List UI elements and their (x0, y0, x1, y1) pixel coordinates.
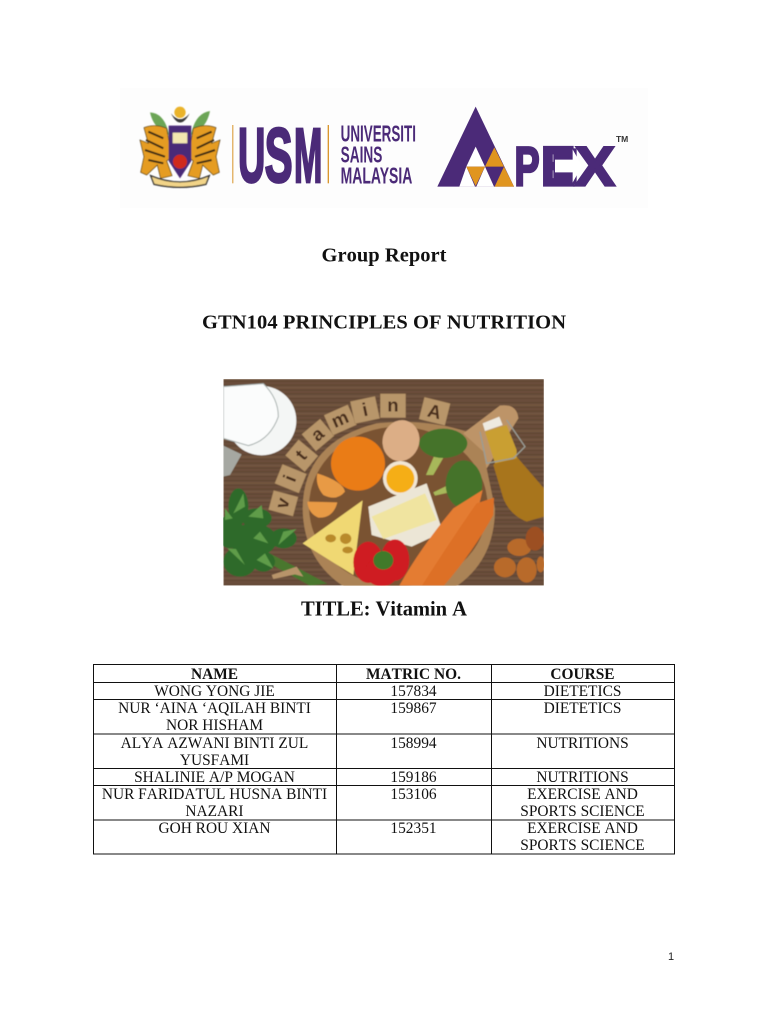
oil bottle (480, 417, 544, 522)
shield (169, 126, 191, 178)
logo: USM wordmark: SAINS (341, 141, 382, 167)
letter tiles: m (328, 406, 352, 432)
row: Nur Aina Aqilah (118, 700, 621, 734)
butter on paper (368, 483, 442, 547)
red pepper (353, 539, 409, 586)
logo: APEX: P (514, 136, 540, 198)
row: Nur Aina Aqilah: DIETETICS (544, 700, 621, 717)
row: Nur Faridatul: SPORTS SCIENCE (520, 803, 645, 820)
row: Alya Azwani: NUTRITIONS (536, 735, 629, 752)
logo: APEX: E (541, 136, 576, 198)
row: Nur Faridatul: NUR FARIDATUL HUSNA BINTI (102, 786, 327, 803)
row: Shalinie: 159186 (390, 769, 437, 786)
egg (382, 419, 420, 462)
row: Nur Faridatul (102, 786, 645, 820)
mandarin segments (307, 473, 345, 518)
letter tiles: i (360, 399, 370, 420)
row: Goh Rou Xian: EXERCISE AND (527, 820, 638, 837)
carrots (399, 490, 494, 586)
sun and crescent (171, 107, 190, 122)
row: Alya Azwani (121, 735, 629, 769)
row: Nur Faridatul: 153106 (390, 786, 437, 803)
letter tiles: t (291, 446, 311, 464)
table header: NAME (191, 666, 238, 683)
photo: vitamin A foods on a wooden board (217, 379, 545, 588)
motto banner (151, 176, 209, 187)
report cover page (93, 106, 675, 960)
tigers (140, 126, 220, 178)
row: Wong Yong Jie (154, 683, 621, 700)
logo: USM wordmark: S (265, 113, 293, 199)
logo banner (120, 88, 648, 208)
heading: course title: GTN104 PRINCIPLES OF NUTRITION (202, 312, 566, 334)
row: Nur Aina Aqilah: 159867 (390, 700, 437, 717)
logo: USM wordmark: U (238, 113, 265, 199)
row: Alya Azwani: YUSFAMI (180, 752, 249, 769)
table header: COURSE (550, 666, 615, 683)
letter tiles: a (307, 422, 328, 445)
letter tiles: A (426, 400, 444, 423)
table header (191, 666, 615, 683)
row: Wong Yong Jie: 157834 (390, 683, 437, 700)
row: Wong Yong Jie: WONG YONG JIE (154, 683, 275, 700)
row: Nur Faridatul: EXERCISE AND (527, 786, 638, 803)
table: group members (94, 664, 674, 854)
broccoli (419, 429, 482, 508)
milk jug (223, 384, 296, 477)
letter tiles: i (279, 472, 300, 485)
row: Goh Rou Xian (158, 820, 645, 854)
egg yolk bowl (383, 461, 418, 496)
row: Goh Rou Xian: SPORTS SCIENCE (520, 837, 645, 854)
logo: USM crest (140, 107, 220, 187)
letter tiles: n (387, 395, 399, 416)
heading: report title: TITLE: Vitamin A (301, 598, 467, 620)
row: Nur Aina Aqilah: NOR HISHAM (166, 717, 263, 734)
palm fronds (150, 111, 210, 135)
logo: APEX: TM (616, 135, 629, 144)
logo: APEX (437, 107, 629, 198)
orange (331, 437, 385, 491)
heading: Group Report: Group Report (322, 244, 447, 266)
logo: USM wordmark: UNIVERSITI (341, 121, 416, 147)
row: Shalinie: NUTRITIONS (536, 769, 629, 786)
page number: 1 (668, 951, 674, 963)
logo: USM wordmark: M (294, 113, 322, 199)
row: Goh Rou Xian: 152351 (390, 820, 437, 837)
logo: USM wordmark (232, 113, 416, 199)
row: Alya Azwani: ALYA AZWANI BINTI ZUL (121, 735, 308, 752)
logo: APEX: X (575, 136, 615, 198)
letter tiles (269, 394, 450, 516)
row: Goh Rou Xian: GOH ROU XIAN (158, 820, 271, 837)
table header: MATRIC NO. (366, 666, 461, 683)
parsley (217, 488, 327, 586)
dried apricots (494, 527, 545, 583)
cheese wedge (303, 500, 363, 575)
letter tiles: v (271, 495, 294, 511)
logo: USM wordmark: MALAYSIA (341, 162, 412, 188)
wooden board (303, 405, 518, 588)
row: Shalinie: SHALINIE A/P MOGAN (134, 769, 295, 786)
row: Nur Aina Aqilah: NUR ‘AINA ‘AQILAH BINTI (118, 700, 311, 717)
row: Wong Yong Jie: DIETETICS (544, 683, 621, 700)
row: Shalinie (134, 769, 629, 786)
row: Nur Faridatul: NAZARI (185, 803, 244, 820)
row: Alya Azwani: 158994 (390, 735, 437, 752)
